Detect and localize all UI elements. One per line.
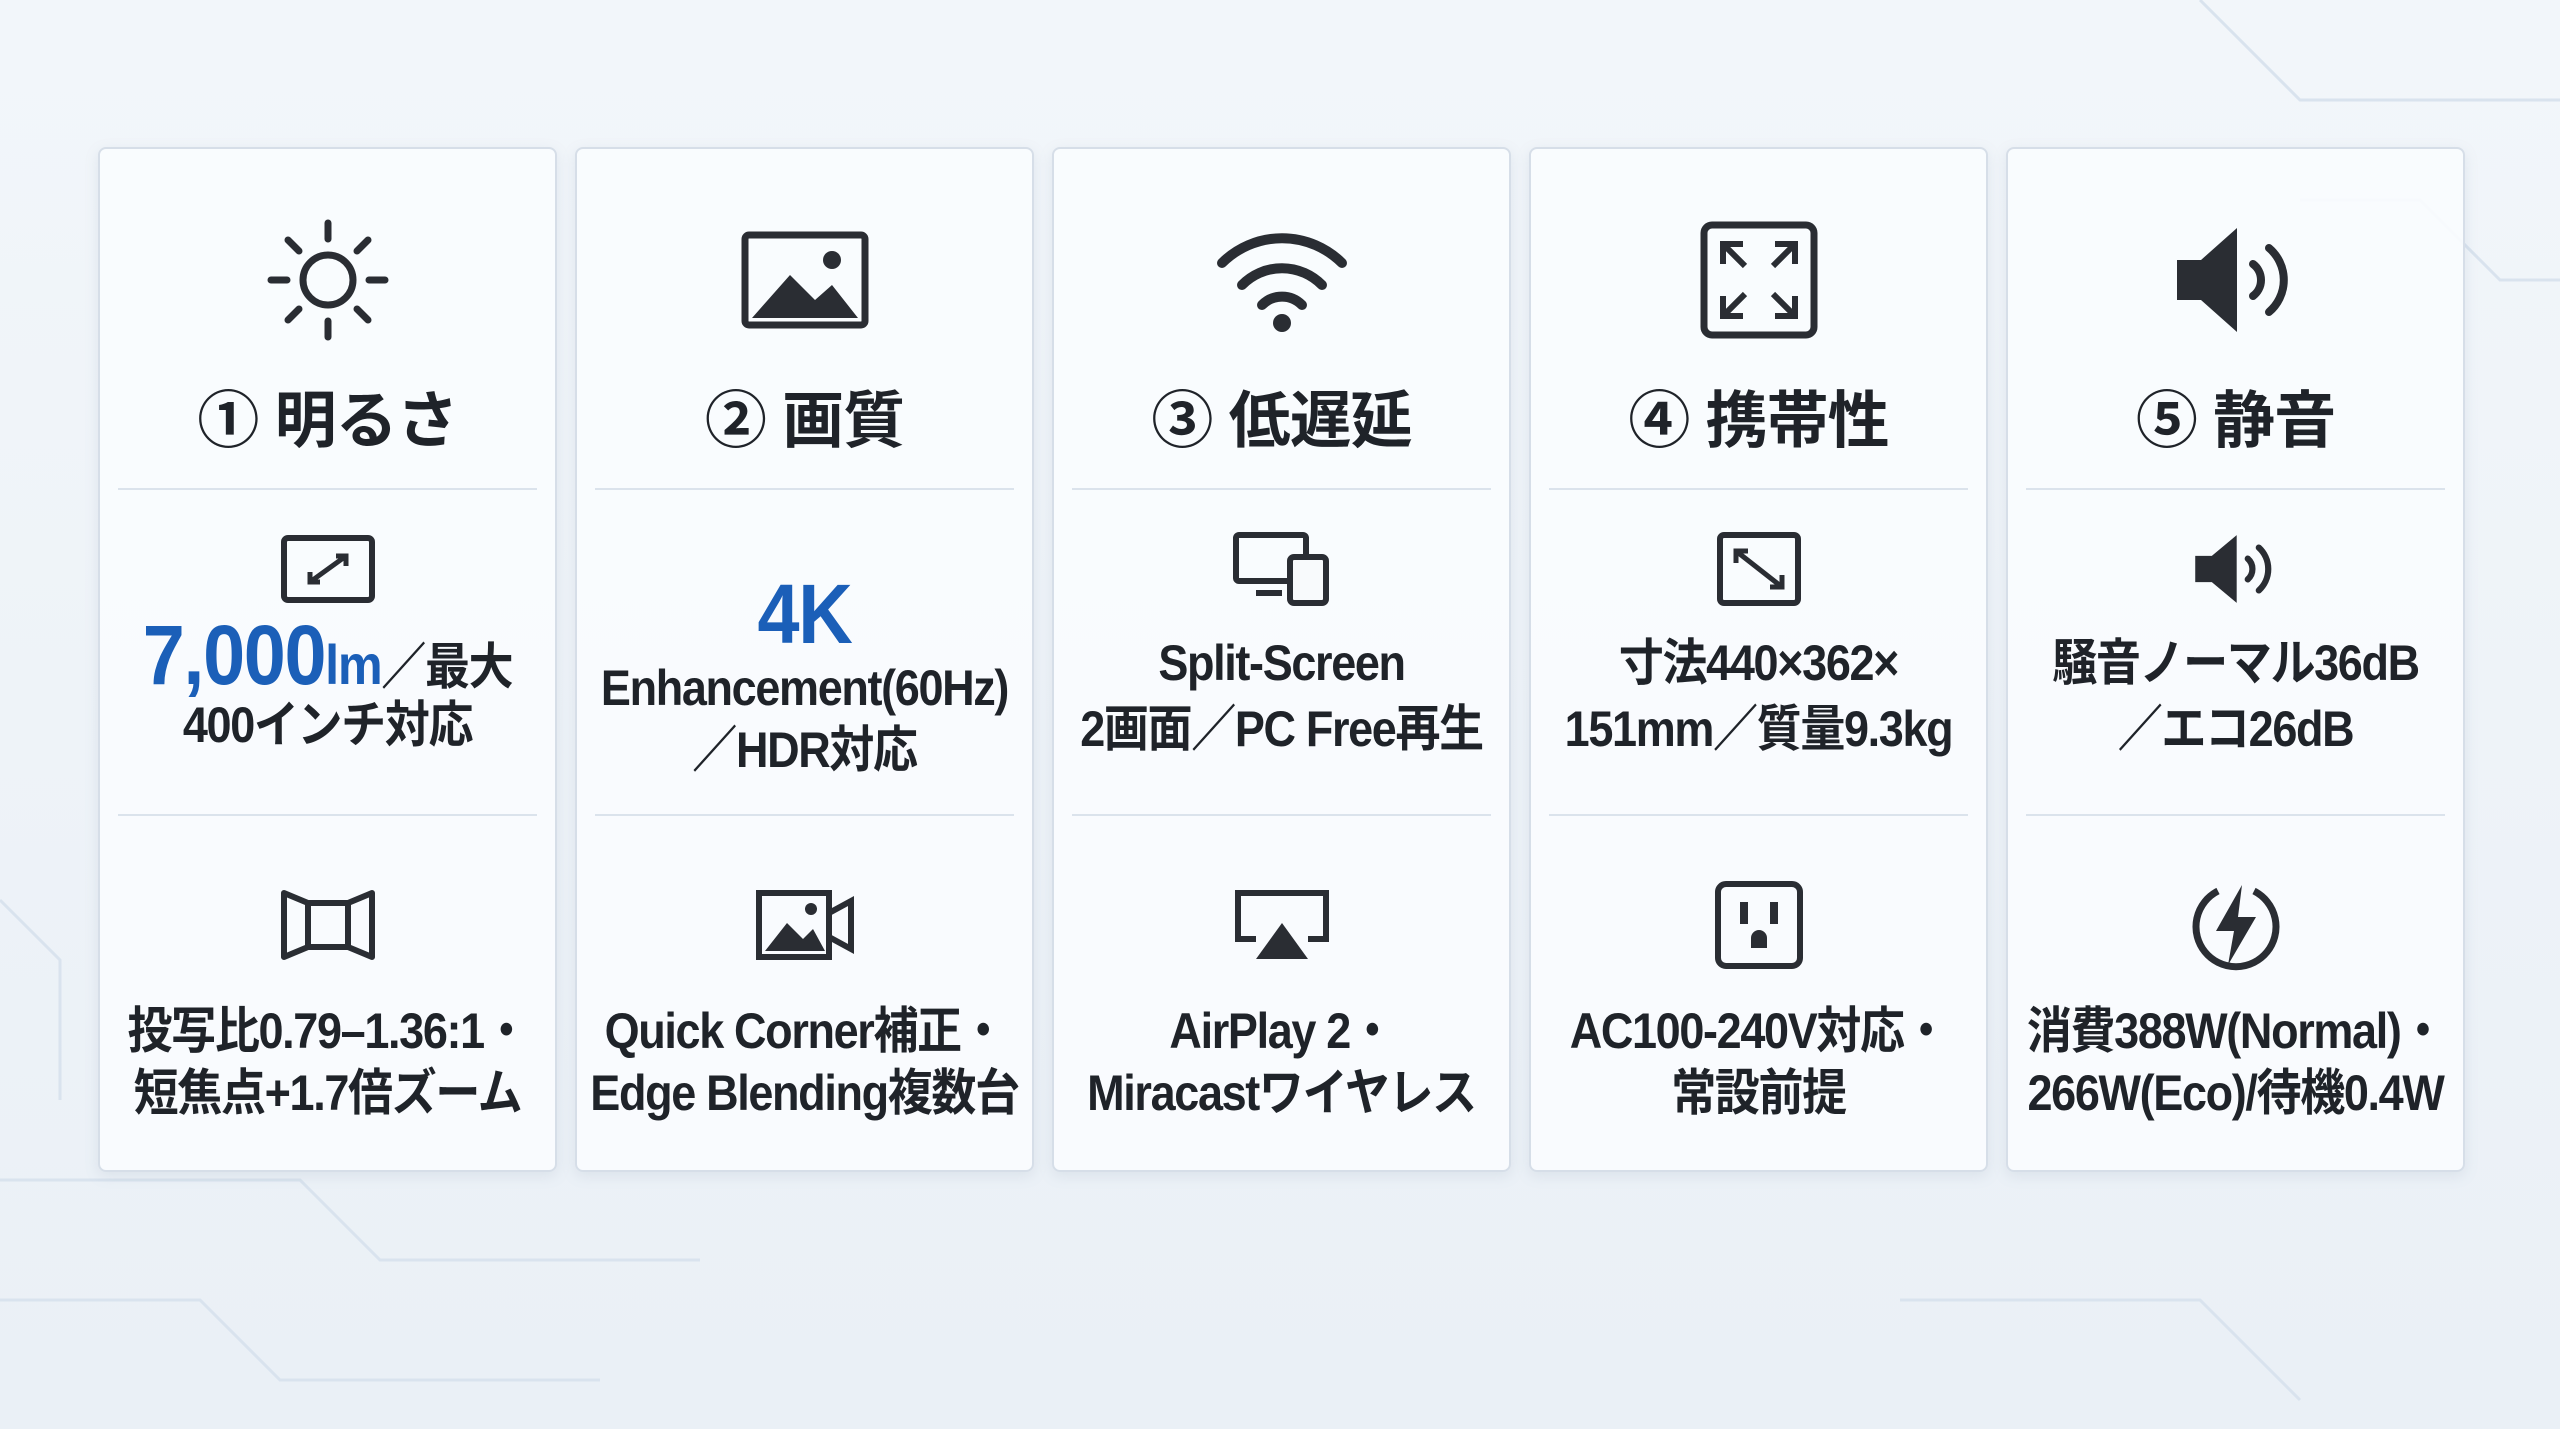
text: noise: 騒音ノーマル36dB <box>2052 635 2419 691</box>
panel: low latency <box>1052 147 1511 1172</box>
icon: outlet <box>1715 881 1803 969</box>
icon: dimension <box>1717 532 1801 606</box>
text: consumption: 消費388W(Normal)・ <box>2027 1003 2444 1059</box>
heading: ③ 低遅延 <box>1151 387 1412 456</box>
panel: low latency: 2画面／PC Free再生 <box>1080 701 1483 757</box>
panel: quiet <box>2006 147 2465 1172</box>
heading: ④ 携帯性 <box>1628 387 1889 456</box>
text: 4K: 4K <box>758 567 851 661</box>
panel: portability <box>1529 147 1988 1172</box>
text: lumens: 7,000lm／最大 <box>143 608 512 702</box>
icon: power bolt <box>2192 885 2280 970</box>
text: airplay: AirPlay 2・ <box>1169 1003 1394 1059</box>
heading: ② 画質 <box>705 387 904 456</box>
icon: small speaker <box>2195 535 2272 603</box>
icon: devices <box>1233 532 1329 606</box>
panel: portability: 151mm／質量9.3kg <box>1565 701 1952 757</box>
panel: brightness <box>98 147 557 1172</box>
text: power: AC100-240V対応・ <box>1570 1003 1947 1059</box>
text: keystone: Quick Corner補正・ <box>605 1003 1004 1059</box>
heading: ⑤ 静音 <box>2136 387 2335 456</box>
text: split screen: Split-Screen <box>1158 635 1405 691</box>
panel: brightness: 短焦点+1.7倍ズーム <box>134 1065 521 1121</box>
panel: low latency: Miracastワイヤレス <box>1087 1065 1476 1121</box>
panel: image quality <box>575 147 1034 1172</box>
icon: fullscreen <box>1700 222 1818 338</box>
icon: sun <box>268 220 388 340</box>
panel: image quality: ／HDR対応 <box>692 722 917 778</box>
text: throw ratio: 投写比0.79–1.36:1・ <box>128 1003 527 1059</box>
icon: picture <box>742 232 868 328</box>
icon: expand screen <box>281 535 375 603</box>
panel: quiet: 266W(Eco)/待機0.4W <box>2028 1065 2443 1121</box>
panel: portability: 常設前提 <box>1671 1065 1846 1121</box>
heading: ① 明るさ <box>197 387 458 456</box>
panel: image quality: Edge Blending複数台 <box>590 1065 1019 1121</box>
icon: throw <box>281 890 375 960</box>
icon: wifi <box>1217 233 1347 332</box>
icon: image projector <box>756 890 854 960</box>
panel: image quality: Enhancement(60Hz) <box>601 660 1008 716</box>
text: dimensions: 寸法440×362× <box>1619 635 1898 691</box>
panel: brightness: 400インチ対応 <box>183 697 472 753</box>
icon: airplay <box>1235 890 1329 959</box>
icon: speaker <box>2177 228 2288 332</box>
panel: quiet: ／エコ26dB <box>2118 701 2353 757</box>
